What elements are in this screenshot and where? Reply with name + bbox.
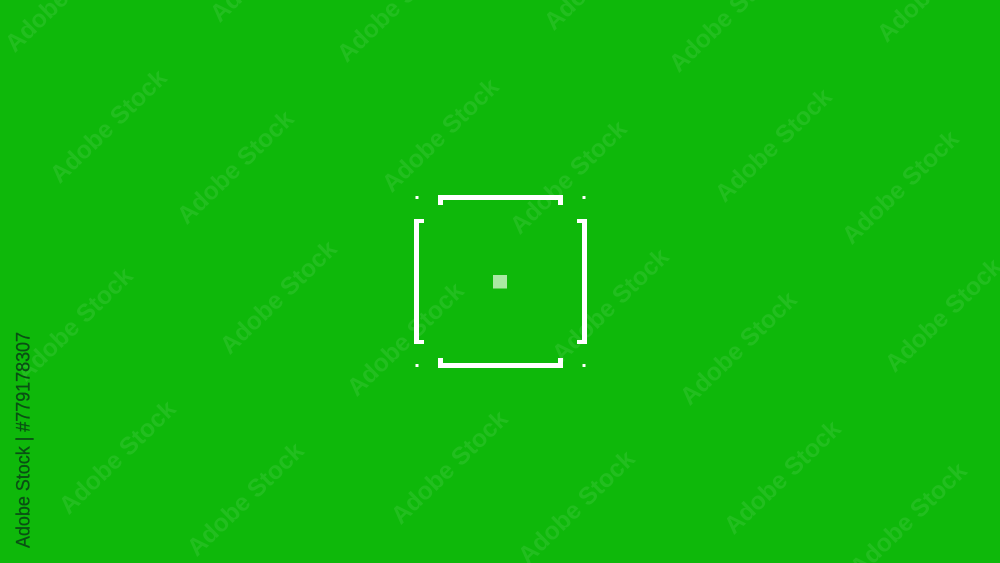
viewfinder frame <box>414 195 587 368</box>
right bracket <box>577 219 587 344</box>
watermark pattern: Adobe Stock: Adobe Stock <box>719 415 847 540</box>
watermark pattern: Adobe Stock: Adobe Stock <box>45 64 173 189</box>
center focus square <box>493 275 507 288</box>
corner dots <box>416 196 586 367</box>
watermark pattern: Adobe Stock: Adobe Stock <box>54 395 182 520</box>
watermark pattern: Adobe Stock: Adobe Stock <box>342 277 470 402</box>
watermark pattern: Adobe Stock: Adobe Stock <box>675 286 803 411</box>
watermark pattern: Adobe Stock: Adobe Stock <box>377 73 505 198</box>
watermark pattern: Adobe Stock: Adobe Stock <box>505 115 633 240</box>
watermark pattern: Adobe Stock: Adobe Stock <box>182 437 310 562</box>
watermark pattern: Adobe Stock: Adobe Stock <box>547 243 675 368</box>
watermark pattern: Adobe Stock: Adobe Stock <box>215 235 343 360</box>
watermark pattern: Adobe Stock: Adobe Stock <box>11 262 139 387</box>
watermark pattern: Adobe Stock: Adobe Stock <box>386 405 514 530</box>
watermark pattern: Adobe Stock: Adobe Stock <box>710 83 838 208</box>
top bracket <box>438 195 563 205</box>
watermark pattern: Adobe Stock: Adobe Stock <box>837 125 965 250</box>
vertical stock id label: Adobe Stock | #779178307 <box>14 332 34 548</box>
bottom bracket <box>438 358 563 368</box>
left bracket <box>414 219 424 344</box>
watermark pattern: Adobe Stock: Adobe Stock <box>172 105 300 230</box>
